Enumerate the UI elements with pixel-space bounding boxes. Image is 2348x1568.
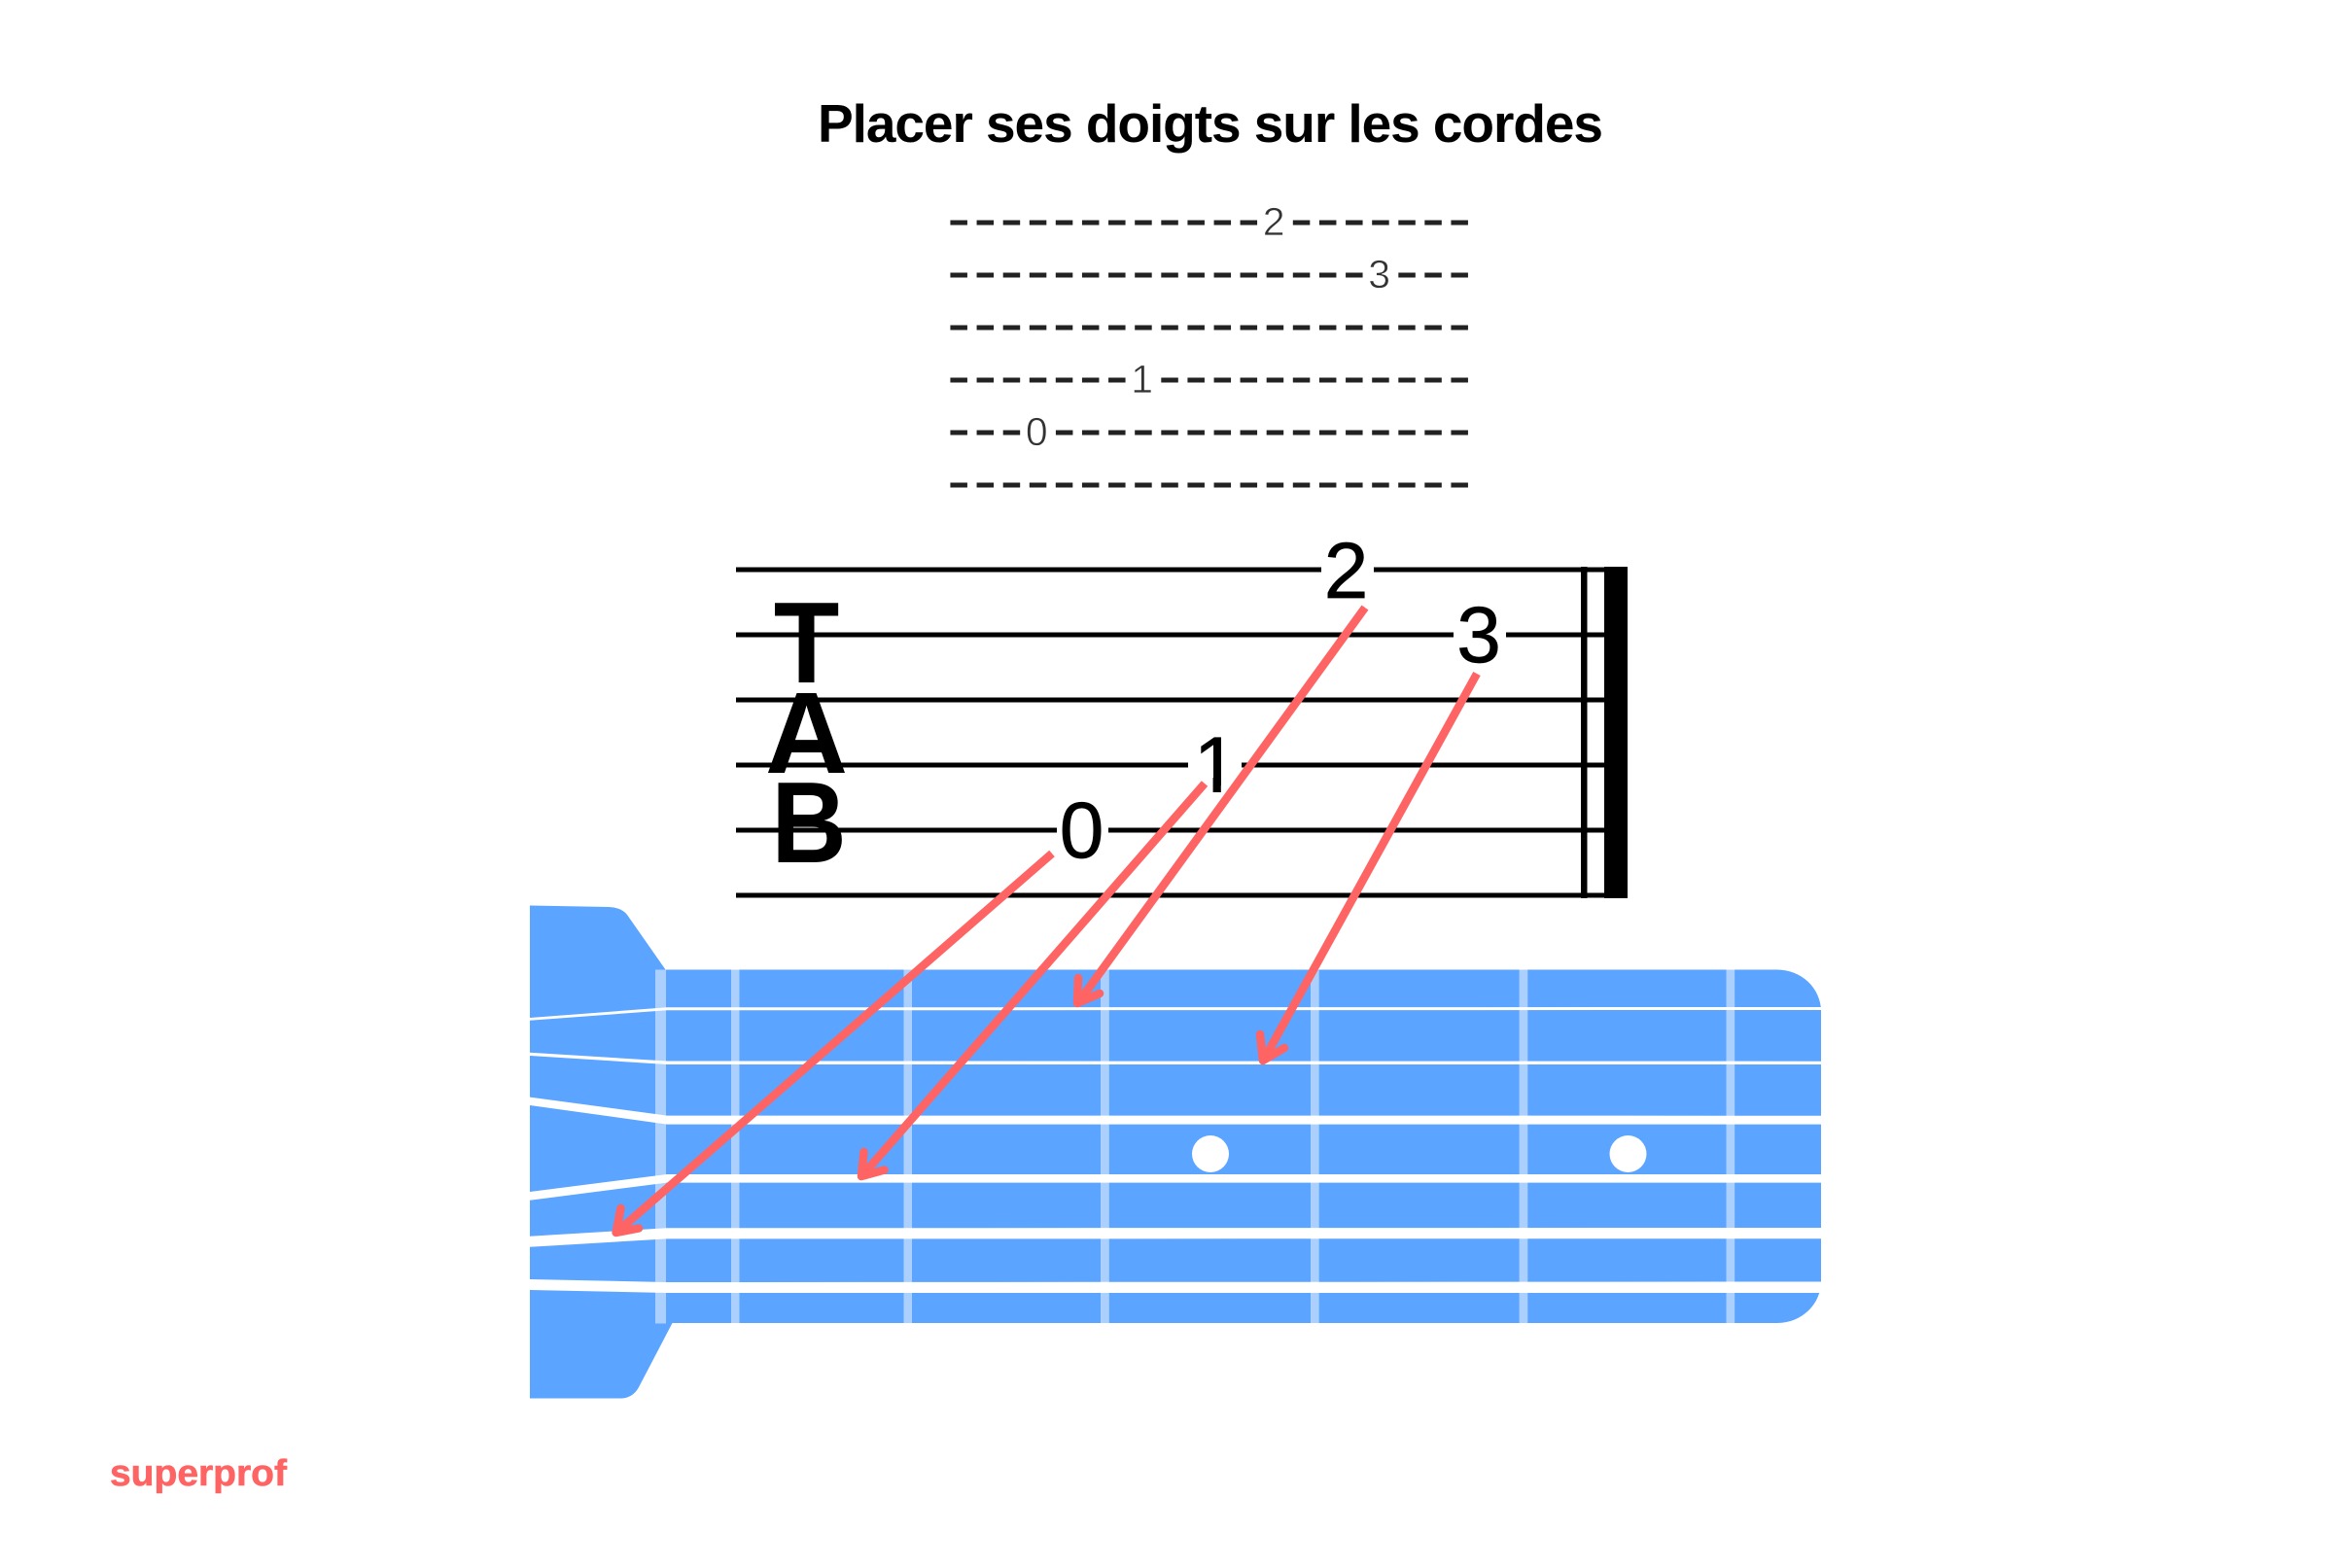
ascii tablature: ---------------- bbox=[1045, 399, 1468, 469]
ascii tablature: -------------------- bbox=[940, 294, 1468, 364]
TAB clef: B bbox=[771, 758, 847, 887]
arrow: 1 to first fret bbox=[861, 784, 1205, 1176]
fret numbers: 1 bbox=[1194, 721, 1238, 810]
frets bbox=[655, 970, 1735, 1324]
ascii tablature: 2 bbox=[1263, 199, 1289, 244]
ascii tablature: ------------ bbox=[940, 189, 1257, 259]
TAB clef: T bbox=[774, 578, 839, 708]
logo: superprof: superprof bbox=[110, 1453, 287, 1494]
arrow: 3 to third fret bbox=[1260, 674, 1477, 1061]
TAB clef: A bbox=[765, 669, 848, 798]
arrow: 2 to second fret bbox=[1077, 608, 1365, 1003]
title: Placer ses doigts sur les cordes bbox=[818, 93, 1603, 154]
ascii tablature: ---------------- bbox=[940, 241, 1363, 311]
fretboard bbox=[530, 906, 1821, 1398]
ascii tablature: -------------------- bbox=[940, 451, 1468, 521]
strings bbox=[530, 1007, 1821, 1293]
end bars bbox=[1581, 567, 1628, 898]
ascii tablature: ------------ bbox=[1151, 346, 1468, 416]
TAB clef bbox=[765, 578, 848, 887]
fret numbers: 3 bbox=[1456, 591, 1501, 679]
arrow: 0 to open string bbox=[616, 854, 1052, 1233]
ascii tablature: ------- bbox=[1282, 189, 1468, 259]
ascii tablature: 0 bbox=[1026, 409, 1052, 454]
ascii tablature: 3 bbox=[1368, 252, 1394, 296]
ascii tablature: ------- bbox=[940, 346, 1126, 416]
headstock and neck body bbox=[530, 906, 1821, 1398]
ascii tablature: --- bbox=[940, 399, 1020, 469]
staff lines bbox=[736, 568, 1628, 898]
fret markers bbox=[1192, 1135, 1647, 1172]
guitar tablature staff bbox=[736, 527, 1628, 898]
fret numbers: 2 bbox=[1324, 527, 1368, 615]
ascii tablature: 1 bbox=[1131, 357, 1157, 401]
fret numbers bbox=[1057, 527, 1506, 875]
ascii tablature: --- bbox=[1388, 241, 1468, 311]
ascii tablature bbox=[940, 189, 1468, 521]
fret numbers: 0 bbox=[1060, 786, 1104, 875]
